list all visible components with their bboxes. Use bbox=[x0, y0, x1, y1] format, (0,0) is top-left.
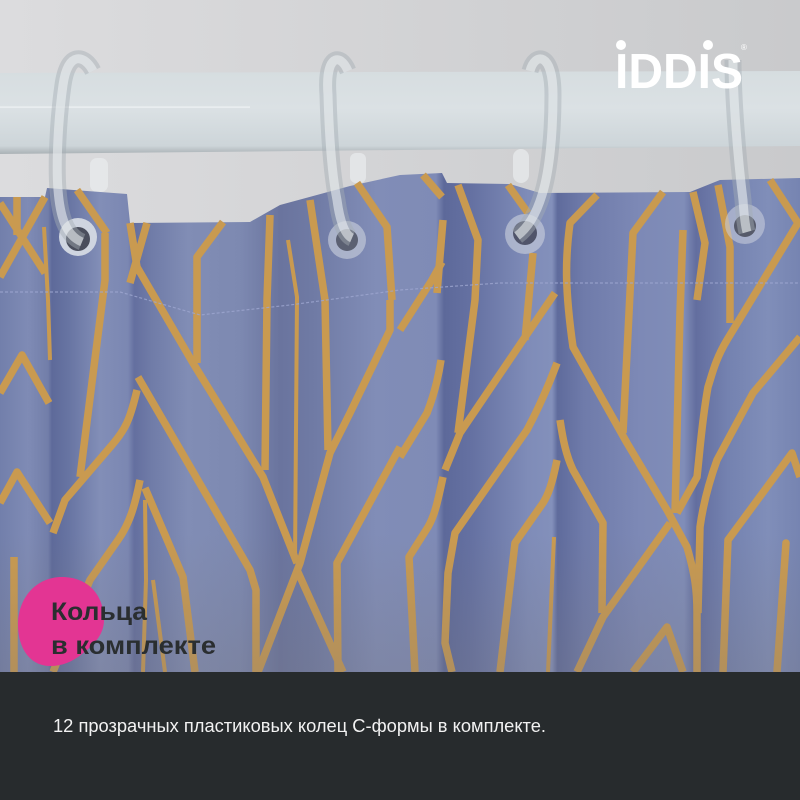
curtain panel bbox=[0, 173, 800, 672]
ring 1 with grommet bbox=[57, 59, 97, 256]
background wall fabric bbox=[0, 0, 800, 240]
stitched hem line bbox=[0, 283, 800, 315]
logo: IDDIS: IDDIS bbox=[615, 45, 743, 99]
callout heading: Кольца bbox=[51, 598, 148, 626]
ring 2 with grommet bbox=[328, 60, 366, 259]
pink blob bbox=[18, 577, 104, 666]
dark footer band bbox=[0, 672, 800, 800]
curtain rod bbox=[0, 71, 800, 154]
orange geometric pattern bbox=[0, 175, 800, 672]
ring 3 with grommet bbox=[505, 59, 553, 254]
logo: IDDIS: ® bbox=[741, 43, 747, 52]
callout heading bbox=[51, 598, 216, 660]
ring 4 with grommet bbox=[725, 60, 765, 244]
small ring tips behind rod bbox=[90, 149, 529, 192]
footer description: 12 прозрачных пластиковых колец С-формы в комплекте. bbox=[53, 716, 546, 736]
callout heading: в комплекте bbox=[51, 632, 216, 660]
